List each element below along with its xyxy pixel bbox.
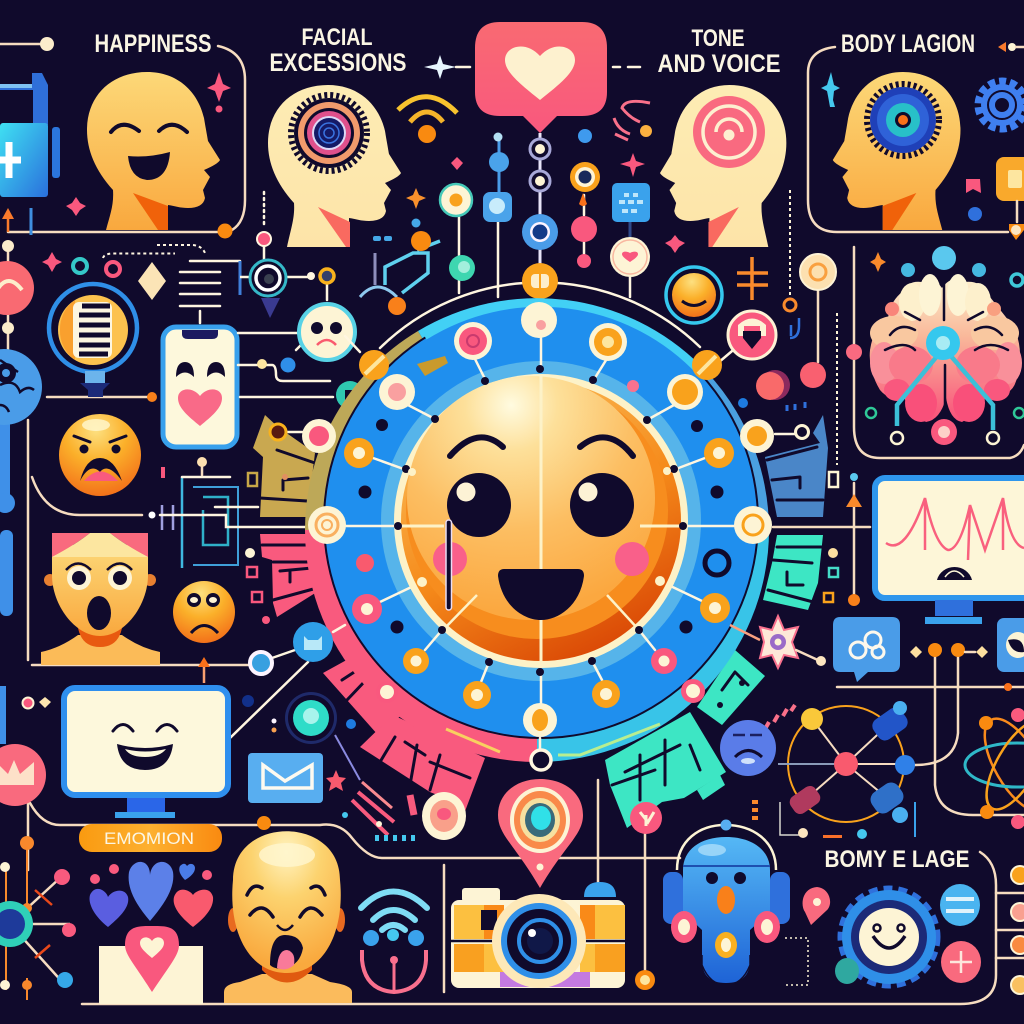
icon: orange tile — [996, 157, 1024, 240]
node: right orange inner — [704, 438, 734, 468]
left cheek — [433, 542, 467, 576]
nodes on disc — [270, 302, 808, 770]
emoji: cream sad face — [299, 304, 355, 360]
node: pink on teal — [681, 679, 705, 703]
mouth — [498, 569, 584, 620]
node: camera ring — [240, 192, 334, 318]
icon: blue tile far right — [997, 618, 1024, 672]
node: orange note — [667, 374, 703, 410]
icon: orange cross symbol — [737, 257, 768, 300]
node: cream rose — [379, 374, 415, 410]
outer ring segment: blue right block — [765, 415, 828, 517]
icon: wifi — [398, 97, 457, 143]
monitor: happy face — [64, 688, 228, 818]
node: white ring bottom — [531, 738, 551, 770]
network left bottom — [0, 836, 76, 1000]
title: facial excessions: EXCESSIONS — [270, 49, 406, 77]
head: facial expressions — [268, 85, 401, 247]
line: dotted with box — [829, 313, 838, 487]
head: happiness — [87, 72, 220, 230]
node: cream lollipop — [800, 254, 836, 388]
emoji: sad — [173, 581, 235, 643]
outer ring segment: teal bottom blocks — [605, 650, 765, 828]
lines: list block — [180, 261, 240, 323]
icon: cyan wrench link — [360, 218, 440, 315]
icon: pink badge with orange base — [630, 802, 662, 990]
camera — [451, 888, 625, 988]
face — [394, 374, 688, 668]
head: body language — [833, 72, 960, 230]
phone: heart app — [163, 327, 237, 447]
title: tone and voice — [658, 25, 780, 78]
icon: speech tile right — [833, 617, 900, 682]
node column: right nodes — [570, 129, 650, 297]
small decorations on disc — [356, 554, 374, 572]
button: equals — [940, 884, 980, 926]
robot — [663, 820, 808, 985]
node: lower right orange — [700, 593, 730, 623]
node: bottom orange right — [592, 680, 620, 708]
ring accents — [446, 729, 500, 752]
icon: wifi person — [361, 892, 427, 992]
node: cream top — [521, 302, 557, 338]
icon: pink sparkles — [66, 72, 231, 216]
title: facial excessions: FACIAL — [302, 24, 372, 51]
node: left orange — [344, 438, 374, 468]
blue disc — [323, 303, 759, 739]
node: orange on mic line — [147, 392, 157, 402]
right cheek — [615, 542, 649, 576]
icon: pink star badge — [730, 616, 826, 668]
icon: smiley gear — [835, 888, 938, 986]
outer ring segment: teal right block — [763, 535, 823, 610]
node: pink on brain frame — [846, 344, 862, 360]
cream knobs — [408, 467, 671, 587]
emoji: angry — [59, 414, 141, 496]
icon: pink and blue bits — [966, 179, 982, 221]
circuit: maze lines — [148, 457, 308, 568]
head: bald yawning face — [224, 831, 352, 1003]
icon: microphone badge — [49, 284, 137, 397]
icon: pink stripes — [326, 770, 414, 835]
icon: small swirl — [614, 101, 652, 140]
right eye — [570, 473, 634, 537]
nodes: orange right pair — [910, 643, 1012, 691]
icon: orange and pink sparkles — [406, 153, 886, 272]
brain base mass — [870, 279, 1020, 422]
node: orange left top — [345, 336, 389, 380]
ring sector: teal bottom right — [537, 530, 769, 762]
node: bottom orange left — [463, 681, 491, 709]
icon: blue robot edge — [0, 349, 42, 744]
icon: small rings row — [42, 245, 205, 300]
button: plus — [941, 941, 981, 983]
node: pink on ring — [376, 681, 398, 703]
title: happiness: HAPPINESS — [94, 30, 212, 58]
node column: center chain — [522, 133, 558, 299]
small pink squares — [245, 548, 270, 624]
label pill: emotion: EMOMION — [104, 829, 194, 848]
small squares right — [824, 548, 838, 602]
node: right orange — [740, 419, 808, 453]
icon: blue device top left — [0, 73, 60, 197]
node: pink swirl — [454, 322, 492, 360]
icon: pink pin small — [803, 887, 830, 925]
icon: blue gear target — [867, 84, 939, 156]
icon: location pin target — [498, 779, 583, 888]
icon: hearts — [90, 862, 213, 927]
node: teal small — [336, 381, 364, 409]
emoji: surprised face — [41, 533, 160, 665]
left eye — [447, 473, 511, 537]
icon: atom — [965, 708, 1024, 829]
spoke lines — [346, 338, 734, 703]
icon: pink dashes — [756, 705, 795, 734]
icon: blue cog right — [978, 81, 1024, 129]
circuit lines from phone — [238, 333, 333, 397]
node: orange right top — [692, 350, 722, 380]
icon: dash connector — [613, 66, 640, 68]
node: left pink — [270, 419, 336, 453]
icon: pink swirl target — [693, 96, 765, 168]
ring sector: khaki top left — [305, 331, 537, 530]
row: cyan and orange dots — [342, 800, 758, 841]
ring sector: cyan top — [418, 298, 701, 530]
line: dotted with ring — [784, 190, 796, 311]
node: orange ring — [589, 323, 627, 361]
monitor: waveform — [875, 478, 1024, 624]
icon: envelope — [248, 753, 323, 803]
node: right swirl — [734, 506, 772, 544]
tear line — [446, 520, 452, 610]
network: molecule — [778, 701, 915, 839]
arrow: small orange — [198, 657, 210, 683]
eyebrows — [450, 437, 633, 456]
icon: brain — [866, 246, 1024, 445]
node: teal target — [242, 692, 360, 780]
ring sector: blue right — [537, 366, 769, 530]
node: bottom left orange — [403, 648, 429, 674]
icon: cream box with heart pin — [99, 926, 203, 1004]
emoji: smile top right — [666, 267, 722, 323]
node: left swirl — [308, 506, 346, 544]
icon: cream egg pin — [422, 792, 466, 840]
node: bottom center cream — [523, 703, 557, 737]
node: orange on line — [257, 816, 271, 830]
title: tone and voice: AND VOICE — [658, 50, 780, 78]
connectors far right — [996, 866, 1024, 994]
icon: berries — [738, 318, 805, 411]
nodes: cyan link — [230, 622, 345, 738]
face divider lines — [400, 374, 682, 668]
ring: main disc — [305, 298, 769, 762]
icon: pink badge left — [0, 744, 46, 806]
node column: left nodes — [440, 132, 512, 297]
title: body language lower: BOMY E LAGE — [824, 846, 970, 873]
node: small left pair — [22, 697, 51, 708]
arrow and post left — [2, 208, 31, 252]
outer ring segment: khaki block — [253, 415, 315, 517]
ring sector: pink bottom left — [305, 530, 537, 762]
outer ring segment: pink left block — [260, 534, 320, 617]
dome on camera — [584, 882, 616, 897]
node: top left connector — [0, 37, 54, 51]
node: orange on frame — [218, 224, 232, 238]
icon: star node — [424, 55, 470, 79]
node: pink arrow — [712, 311, 776, 368]
node: bottom right pink — [651, 648, 677, 674]
node: top right mini connector — [998, 42, 1024, 52]
icon: left pink node phone receiver — [0, 261, 34, 334]
label pill: emotion — [79, 824, 222, 852]
icon: speech bubble heart — [475, 22, 607, 133]
icon: blue sad emoji — [720, 720, 776, 776]
title: facial excessions — [270, 24, 406, 77]
head: tone and voice — [660, 85, 786, 247]
node: lower left pink — [352, 594, 382, 624]
icon: brain gear target — [291, 95, 367, 171]
icon: cyan sparkle — [821, 72, 840, 107]
title: tone and voice: TONE — [692, 25, 744, 52]
outer ring segment: pink bottom blocks — [323, 657, 485, 814]
title: body lagion: BODY LAGION — [841, 30, 975, 58]
junction dots — [358, 365, 724, 676]
arrow: orange up — [846, 473, 862, 606]
